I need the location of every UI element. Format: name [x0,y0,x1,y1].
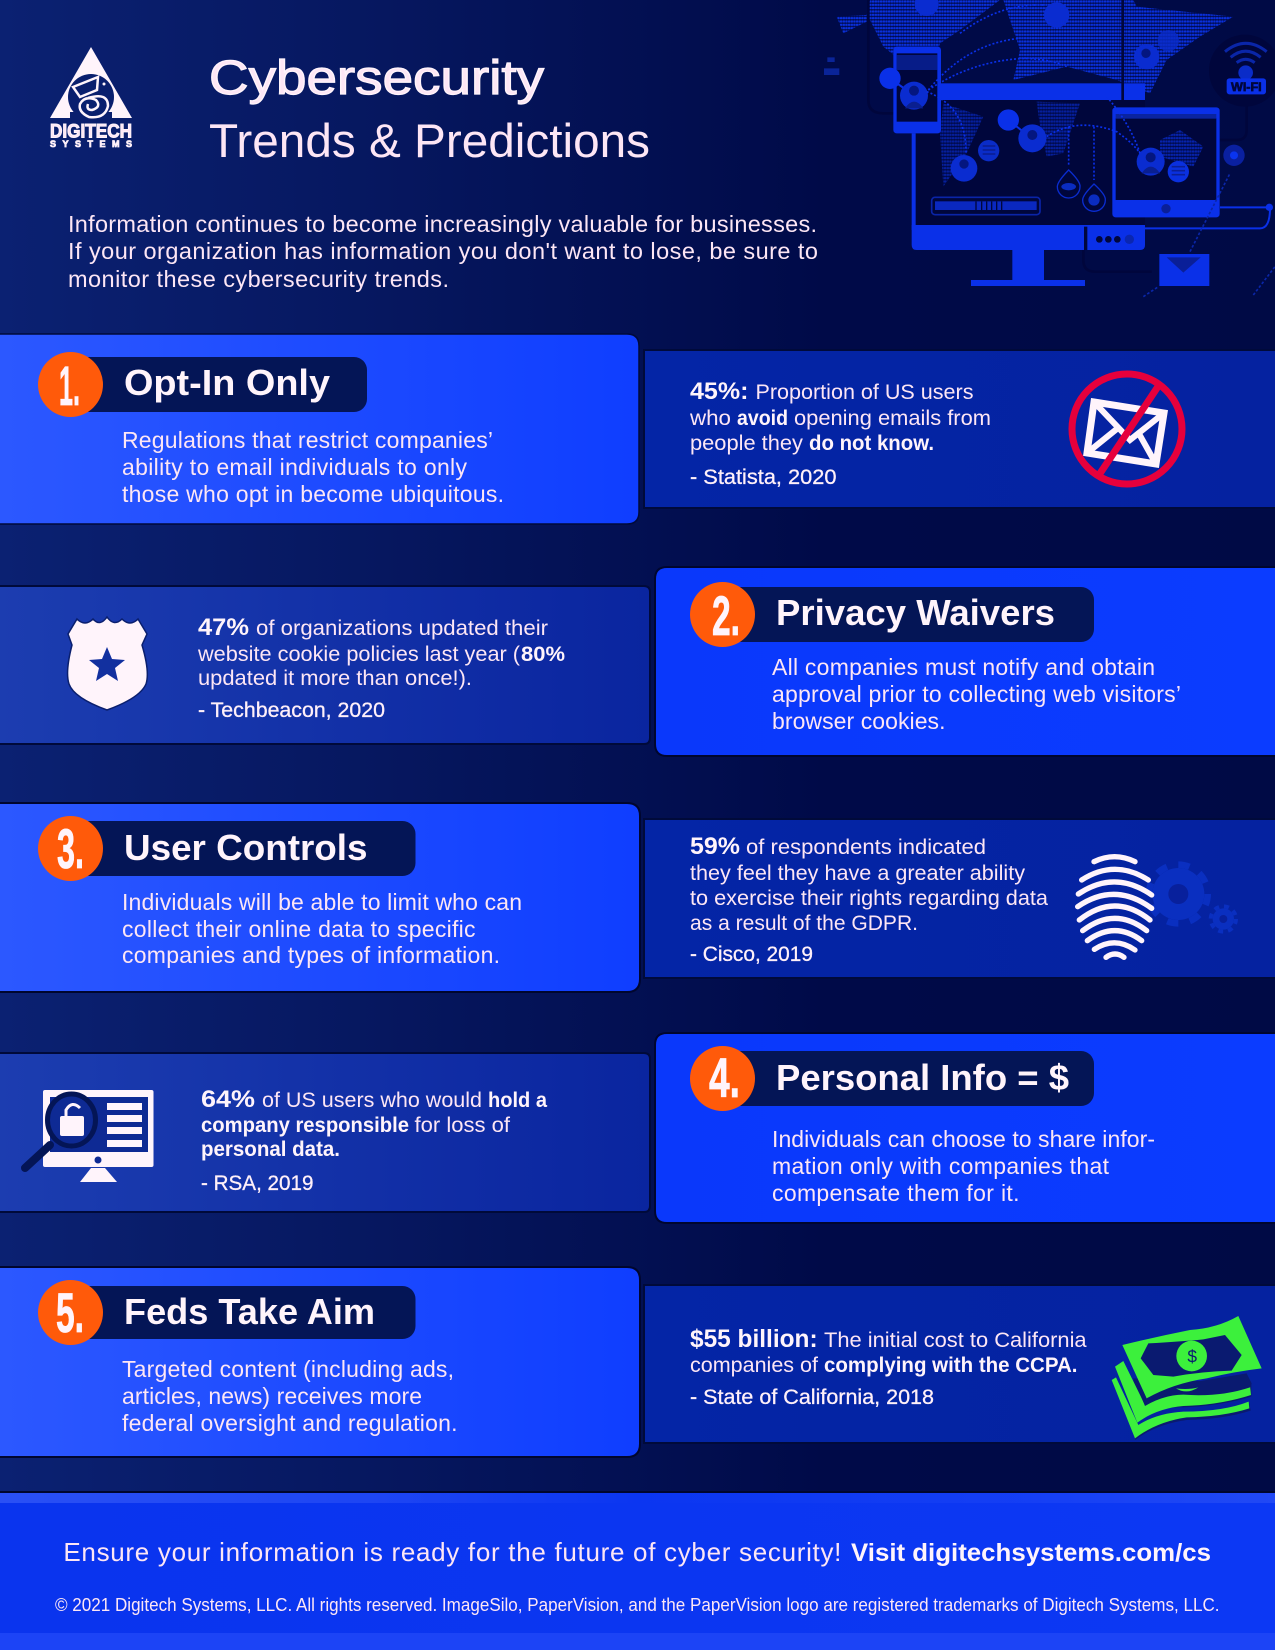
panel: trend 4 statistic: personal data. [201,1137,340,1161]
body text [772,654,1181,734]
panel: trend 1 statistic [644,350,1275,508]
body text: Individuals will be able to limit who can [122,889,522,915]
logo: Digitech Systems [50,47,132,149]
network nodes [915,0,1245,211]
title: Trends & Predictions [209,114,650,167]
panel: trend 2 statistic: - Techbeacon, 2020 [198,698,385,722]
header illustration: connected devices and world map [824,0,1275,297]
copyright: © 2021 Digitech Systems, LLC. All rights reserved. ImageSilo, PaperVision, and the PaperVision logo are registered trademarks of Digitech Systems, LLC. [55,1595,1220,1615]
logo: Digitech Systems: DIGITECH [50,122,132,142]
intro text: If your organization has information you don't want to lose, be sure to [68,238,818,264]
panel: trend 4 statistic: hold a [488,1088,548,1112]
panel: trend 4 Personal Info [655,1033,1275,1223]
heading pill [60,357,367,412]
panel: trend 3 statistic: as a result of the GDPR. [690,911,918,935]
panel: trend 3 statistic: 59% [690,833,740,860]
icon: shield [68,617,147,710]
body text: All companies must notify and obtain [772,654,1155,680]
body text: those who opt in become ubiquitous. [122,481,504,507]
call to action: Visit digitechsystems.com/cs [851,1539,1211,1567]
number badge 3 [38,816,103,881]
icon: fingerprint [1078,857,1152,957]
panel: trend 5 statistic: companies of [690,1353,818,1377]
number badge 4: 4. [709,1046,740,1109]
body text: ability to email individuals to only [122,454,468,480]
body text: articles, news) receives more [122,1383,422,1409]
panel: trend 1 Opt-In Only [0,334,639,524]
phone [879,47,941,133]
icon: monitor with magnifying lock [25,1090,154,1182]
number badge 5 [38,1280,103,1345]
panel: trend 3 statistic: - Cisco, 2019 [690,942,813,966]
panel: trend 1 statistic: who [689,406,731,430]
number badge 1 [38,352,103,417]
panel: trend 1 statistic: opening emails from [794,406,991,430]
body text: companies and types of information. [122,942,500,968]
body text: mation only with companies that [772,1153,1110,1179]
heading pill: Personal Info = $ [776,1057,1069,1098]
logo: Digitech Systems: SYSTEMS [50,139,132,149]
monitor [912,83,1145,286]
panel: trend 1 statistic: do not know. [809,431,934,455]
panel: trend 1 statistic: - Statista, 2020 [690,465,837,489]
body text: Targeted content (including ads, [122,1356,454,1382]
panel: trend 5 statistic: The initial cost to California [824,1328,1087,1352]
number badge 1: 1. [59,354,80,417]
panel: trend 4 statistic: for loss of [414,1113,510,1137]
body text [772,1126,1155,1206]
panel: trend 5 statistic: complying with the CCPA. [824,1353,1078,1377]
body text: approval prior to collecting web visitors’ [772,681,1181,707]
tablet [1112,107,1220,217]
panel: trend 5 statistic: $55 billion: [690,1325,818,1353]
panel: trend 2 statistic: 47% [198,614,249,641]
heading pill [712,587,1094,642]
body text [122,427,504,507]
body text [122,1356,458,1436]
icon: stack of money [1112,1316,1262,1440]
number badge 5: 5. [56,1281,84,1344]
panel: trend 4 statistic: - RSA, 2019 [201,1171,314,1195]
heading pill: User Controls [124,827,368,868]
body text: collect their online data to specific [122,916,476,942]
panel: trend 2 statistic: 80% [521,642,565,666]
panel: trend 2 statistic: website cookie policies last year ( [197,642,521,666]
body text [122,889,522,968]
call to action [63,1537,1211,1567]
panel: trend 3 statistic [644,819,1275,978]
heading pill [60,1286,416,1339]
title: Cybersecurity [209,52,544,105]
panel: trend 5 Feds Take Aim [0,1267,640,1457]
panel: trend 2 statistic: of organizations updated their [256,616,548,640]
title [209,52,650,167]
heading pill: Feds Take Aim [124,1291,375,1332]
heading pill [712,1051,1094,1106]
intro text: monitor these cybersecurity trends. [68,266,449,292]
icon: stack of money: $ [1187,1347,1197,1367]
panel: trend 4 statistic: company responsible [201,1113,409,1137]
panel: trend 3 statistic: of respondents indicated [746,835,986,859]
panel: trend 4 statistic: of US users who would [262,1088,482,1112]
panel: trend 4 statistic: 64% [201,1086,255,1113]
panel: trend 4 statistic [0,1053,650,1212]
number badge 4 [690,1046,755,1111]
panel: trend 1 statistic: people they [690,431,803,455]
heading pill [60,821,416,876]
body text: compensate them for it. [772,1180,1020,1206]
panel: trend 1 statistic: 45%: [690,378,748,405]
panel: trend 3 statistic: to exercise their rights regarding data [690,886,1048,910]
panel: trend 5 statistic [644,1285,1275,1443]
panel: trend 3 statistic: they feel they have a greater ability [690,861,1025,885]
wi-fi badge: WI-FI [1231,80,1262,94]
number badge 2 [690,582,755,647]
number badge 2: 2. [712,584,740,647]
panel: trend 2 statistic [0,586,650,744]
panel: trend 1 statistic: Proportion of US users [756,380,974,404]
heading pill: Privacy Waivers [776,592,1055,633]
body text: federal oversight and regulation. [122,1410,458,1436]
dark cables [868,0,897,113]
body text: browser cookies. [772,708,946,734]
call to action: Ensure your information is ready for the future of cyber security! [63,1537,841,1567]
panel: trend 2 statistic: updated it more than once!). [198,666,472,690]
intro text: Information continues to become increasingly valuable for businesses. [68,211,817,237]
envelope [1159,254,1209,286]
panel: trend 2 Privacy Waivers [655,567,1275,756]
intro text [68,211,818,292]
body text: Individuals can choose to share infor- [772,1126,1155,1152]
body text: Regulations that restrict companies’ [122,427,493,453]
panel: trend 5 statistic: - State of California, 2018 [690,1385,934,1409]
icon: crossed-out envelope [1072,374,1182,484]
footer band [0,1491,1275,1650]
icon: gears [1149,865,1236,932]
wi-fi badge [1209,35,1275,107]
heading pill: Opt-In Only [124,362,330,403]
panel: trend 1 statistic: avoid [737,406,788,430]
number badge 3: 3. [57,817,84,880]
panel: trend 3 User Controls [0,803,640,992]
